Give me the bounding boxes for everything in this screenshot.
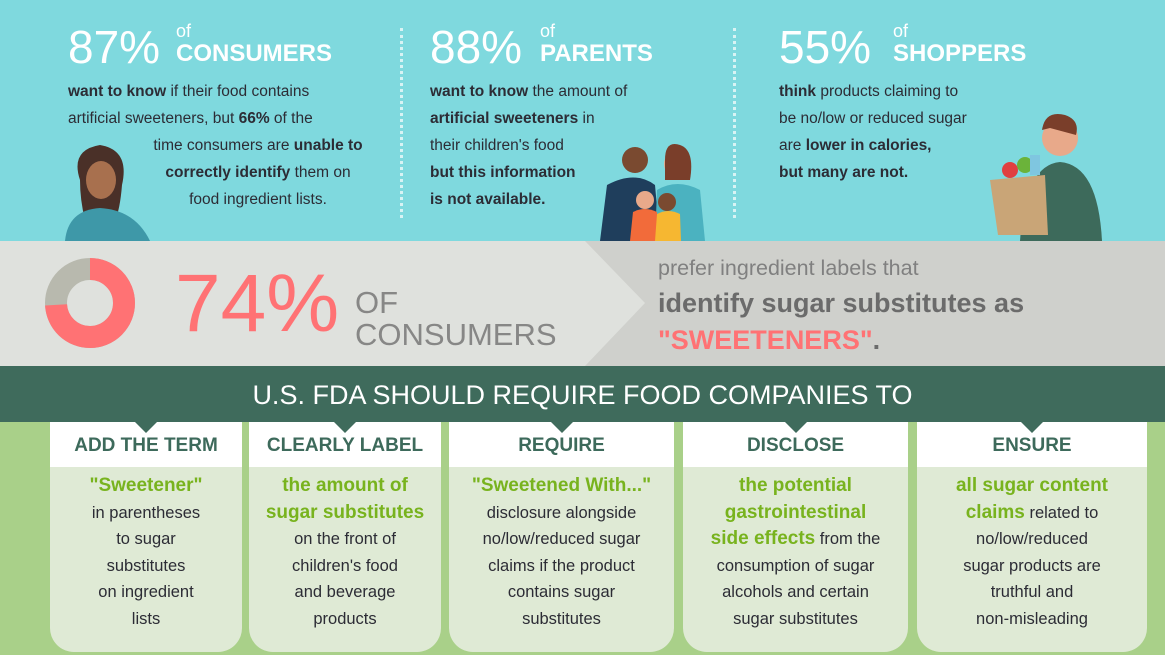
card 2: the amount of bbox=[282, 475, 408, 496]
stat 87%: of bbox=[176, 21, 191, 41]
card 4: consumption of sugar bbox=[717, 556, 874, 574]
stat 87%: food ingredient lists. bbox=[189, 191, 327, 208]
stat 87%: 87% bbox=[68, 21, 160, 73]
card 1: lists bbox=[132, 610, 160, 628]
card 5 bbox=[917, 422, 1147, 652]
stat 87%: correctly identify them on bbox=[165, 164, 351, 181]
card 3: substitutes bbox=[522, 610, 601, 628]
card 2: children's food bbox=[292, 556, 398, 574]
icon: shopper bbox=[990, 114, 1102, 241]
card 3: REQUIRE bbox=[518, 435, 605, 456]
card 2: products bbox=[313, 610, 377, 628]
card 1: substitutes bbox=[107, 556, 185, 574]
card 3: no/low/reduced sugar bbox=[483, 530, 640, 548]
card 3: disclosure alongside bbox=[487, 504, 636, 522]
card 2: and beverage bbox=[295, 583, 395, 601]
stat 87% bbox=[68, 21, 363, 208]
stat 88%: of bbox=[540, 21, 555, 41]
card 5: non-misleading bbox=[976, 610, 1088, 628]
card 5: sugar products are bbox=[963, 556, 1101, 574]
divider bbox=[400, 28, 403, 218]
74% text bbox=[175, 258, 557, 352]
card 1 bbox=[50, 422, 242, 652]
stat 88%: 88% bbox=[430, 21, 522, 73]
green header: U.S. FDA SHOULD REQUIRE FOOD COMPANIES TO bbox=[252, 380, 913, 410]
stat 88%: artificial sweeteners in bbox=[430, 110, 595, 127]
gray band bbox=[0, 241, 1165, 366]
stat 55%: be no/low or reduced sugar bbox=[779, 110, 967, 127]
card 2: sugar substitutes bbox=[266, 502, 424, 522]
card 1: in parentheses bbox=[92, 504, 200, 522]
green header bbox=[0, 366, 1165, 422]
divider bbox=[733, 28, 736, 218]
icon: woman bbox=[65, 145, 150, 241]
card 1: on ingredient bbox=[98, 583, 194, 601]
prefer text: "SWEETENERS". bbox=[658, 325, 880, 355]
74% text: 74% bbox=[175, 258, 339, 349]
stat 88%: their children's food bbox=[430, 137, 564, 154]
stat 88%: PARENTS bbox=[540, 40, 653, 67]
card 2: CLEARLY LABEL bbox=[267, 435, 423, 456]
stat 55%: of bbox=[893, 21, 908, 41]
stat 87%: want to know if their food contains bbox=[68, 83, 309, 100]
stat 55%: are lower in calories, bbox=[779, 137, 932, 154]
card 3: "Sweetened With..." bbox=[472, 475, 651, 496]
card 1: ADD THE TERM bbox=[74, 435, 218, 456]
stat 55%: but many are not. bbox=[779, 164, 908, 181]
stat 87%: CONSUMERS bbox=[176, 40, 332, 67]
74% text: OF bbox=[355, 285, 398, 320]
stat 88%: want to know the amount of bbox=[430, 83, 627, 100]
card 1: to sugar bbox=[116, 530, 176, 548]
card 5: claims related to bbox=[966, 502, 1098, 522]
stat 55% bbox=[779, 21, 1026, 181]
prefer text: prefer ingredient labels that bbox=[658, 256, 919, 280]
card 5: truthful and bbox=[991, 583, 1073, 601]
card 4: DISCLOSE bbox=[747, 435, 844, 456]
card 2 bbox=[249, 422, 441, 652]
card 4: sugar substitutes bbox=[733, 610, 858, 628]
card 1: "Sweetener" bbox=[89, 475, 203, 496]
icon: family bbox=[600, 144, 705, 241]
stat 55%: SHOPPERS bbox=[893, 40, 1026, 67]
74% text: CONSUMERS bbox=[355, 317, 557, 352]
card 4: side effects from the bbox=[711, 528, 880, 549]
prefer text bbox=[658, 256, 1024, 355]
stat 55%: 55% bbox=[779, 21, 871, 73]
top cyan panel bbox=[0, 0, 1165, 241]
card 4 bbox=[683, 422, 908, 652]
donut chart bbox=[45, 258, 135, 348]
stat 87%: artificial sweeteners, but 66% of the bbox=[68, 110, 313, 127]
stat 88% bbox=[430, 21, 653, 208]
stat 88%: but this information bbox=[430, 164, 576, 181]
stat 55%: think products claiming to bbox=[779, 83, 958, 100]
card 4: the potential bbox=[739, 475, 852, 496]
card 5: no/low/reduced bbox=[976, 530, 1088, 548]
prefer text: identify sugar substitutes as bbox=[658, 288, 1024, 318]
card 3: claims if the product bbox=[488, 556, 635, 574]
card 2: on the front of bbox=[294, 530, 396, 548]
stat 88%: is not available. bbox=[430, 191, 545, 208]
card 4: gastrointestinal bbox=[725, 502, 866, 522]
card 3 bbox=[449, 422, 674, 652]
card 5: ENSURE bbox=[992, 435, 1072, 456]
card 4: alcohols and certain bbox=[722, 583, 869, 601]
card 5: all sugar content bbox=[956, 475, 1108, 496]
stat 87%: time consumers are unable to bbox=[153, 137, 363, 154]
card 3: contains sugar bbox=[508, 583, 615, 601]
